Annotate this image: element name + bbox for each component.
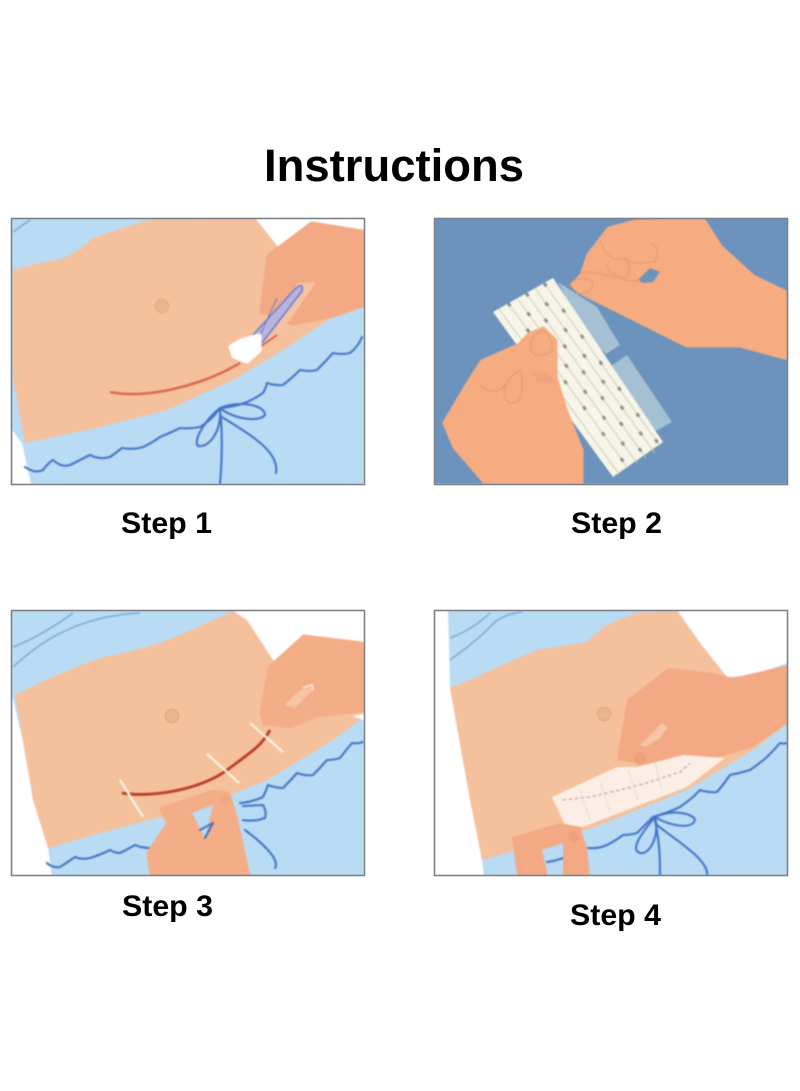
label: step 2: Step 2 (571, 507, 662, 540)
panel: step 3 illustration (11, 610, 364, 876)
panel: step 4 illustration (434, 610, 788, 876)
label: step 3: Step 3 (122, 890, 213, 923)
label: step 4: Step 4 (570, 899, 661, 932)
label: step 1: Step 1 (121, 507, 212, 540)
panel: step 1 illustration (11, 218, 364, 484)
panel: step 2 illustration (434, 218, 788, 484)
title: Instructions (264, 140, 524, 191)
